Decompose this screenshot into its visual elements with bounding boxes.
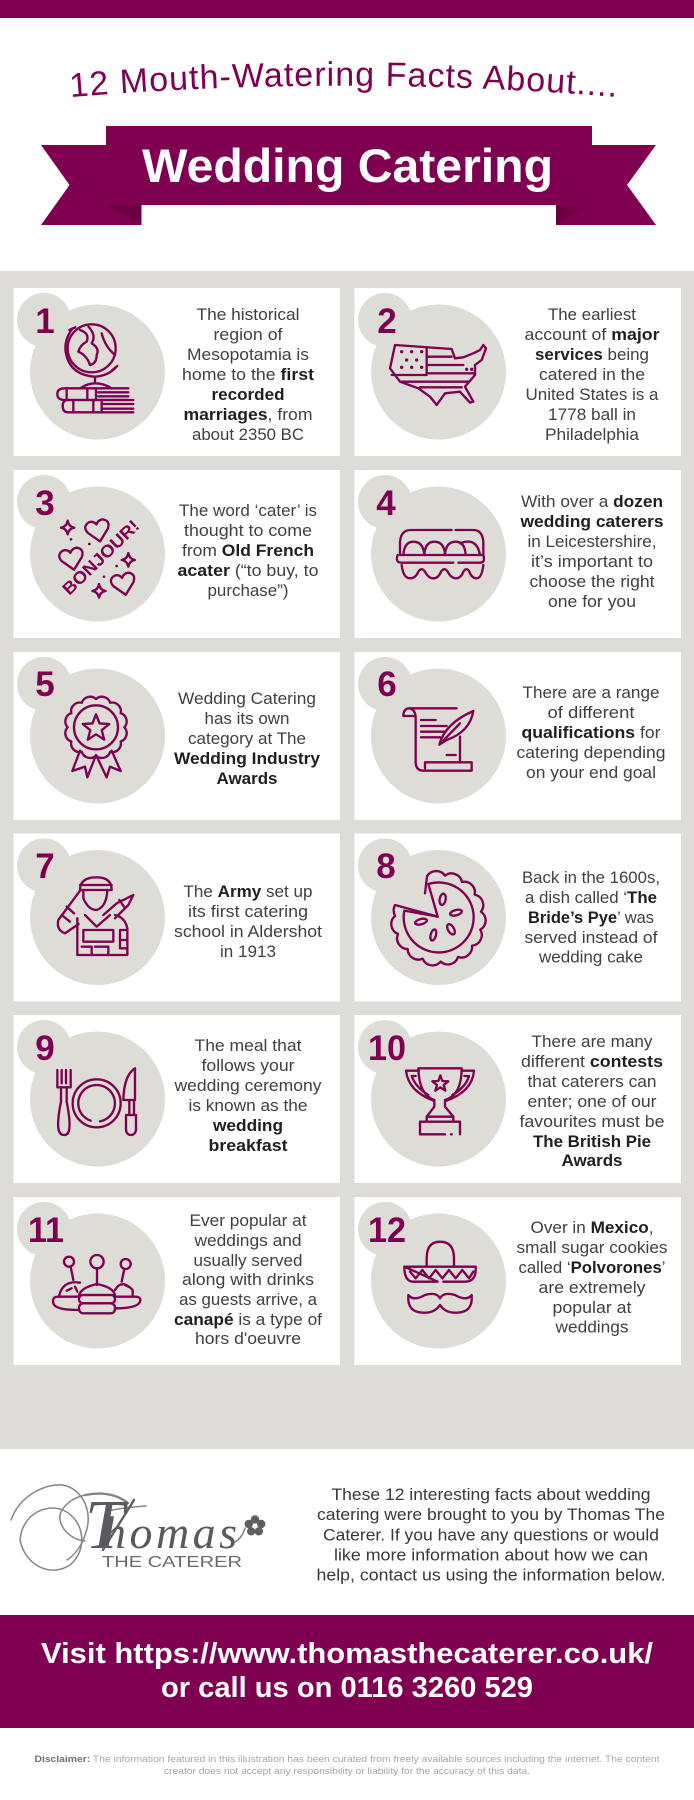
number 8: 8 <box>376 847 396 886</box>
text: fact 4 <box>519 492 664 611</box>
text: fact 10: The British Pie <box>533 1132 651 1151</box>
icon: saluting soldier <box>58 877 133 955</box>
text: fact 11: canapé is a type of <box>174 1310 322 1329</box>
text: fact 10: There are many <box>532 1032 653 1051</box>
text: fact 10: enter; one of our <box>528 1092 657 1111</box>
text: fact 2: account of major <box>524 325 660 344</box>
card 4 <box>354 470 681 638</box>
text: fact 6: of different <box>548 703 635 722</box>
banner: Wedding Catering: Wedding Catering <box>142 139 553 192</box>
card 11 <box>14 1197 340 1365</box>
text: fact 2: catered in the <box>539 365 645 384</box>
logo: Thomas The Caterer: THE CATERER <box>102 1554 242 1571</box>
text: fact 3: The word ‘cater’ is <box>179 501 317 520</box>
card 9 <box>14 1015 340 1183</box>
text: fact 8: wedding cake <box>538 948 643 966</box>
text: fact 9: breakfast <box>208 1136 288 1155</box>
text: fact 4: one for you <box>548 592 636 611</box>
text: fact 10: that caterers can <box>528 1072 656 1091</box>
text: fact 5: Wedding Catering <box>178 689 316 708</box>
text: fact 3: acater (“to buy, to <box>178 561 318 580</box>
text: fact 11 <box>174 1211 322 1348</box>
text: fact 9: is known as the <box>188 1096 308 1115</box>
disclaimer: creator does not accept any responsibility or liability for the accuracy of this data. <box>164 1766 530 1777</box>
text: fact 9: wedding ceremony <box>173 1076 322 1095</box>
text: closing paragraph: Caterer. If you have any questions or would <box>323 1526 659 1544</box>
text: fact 6: qualifications for <box>522 723 661 742</box>
title: 12 Mouth-Watering Facts About: 12 Mouth-Watering Facts About.... <box>72 61 614 97</box>
text: fact 3: thought to come <box>184 521 312 540</box>
icon: Bonjour hearts: BONJOUR! <box>58 516 143 599</box>
text: fact 10: favourites must be <box>520 1112 664 1131</box>
text: fact 7: The Army set up <box>184 882 312 901</box>
text: fact 12: popular at <box>552 1298 632 1317</box>
text: fact 7: in 1913 <box>220 942 276 961</box>
panel: call to action: Visit https://www.thomasthecaterer.co.uk/ <box>41 1638 653 1670</box>
text: fact 11: hors d'oeuvre <box>195 1329 301 1348</box>
card 8 <box>354 834 681 1002</box>
text: fact 5: Awards <box>216 769 278 788</box>
text: fact 6: There are a range <box>522 683 660 702</box>
text: fact 3 <box>178 501 318 600</box>
number 4: 4 <box>376 484 396 523</box>
text: fact 8 <box>522 868 660 966</box>
card 1 <box>14 288 340 456</box>
text: fact 1: The historical <box>196 305 300 324</box>
panel: call to action <box>0 1615 694 1728</box>
text: closing paragraph <box>316 1485 666 1584</box>
icon: canapes <box>53 1255 140 1313</box>
text: fact 8: Back in the 1600s, <box>522 868 660 887</box>
text: fact 12: weddings <box>554 1318 628 1336</box>
card 5 <box>14 652 340 820</box>
text: fact 4: in Leicestershire, <box>528 532 656 551</box>
card 3 <box>14 470 340 638</box>
card 2 <box>354 288 681 456</box>
icon: fork plate knife <box>57 1068 136 1135</box>
text: fact 2: services being <box>535 345 649 364</box>
text: fact 4: choose the right <box>530 572 655 591</box>
number 10: 10 <box>368 1029 406 1068</box>
panel: call to action: or call us on 0116 3260 529 <box>161 1672 533 1704</box>
text: fact 2: United States is a <box>526 385 659 404</box>
text: fact 3: purchase”) <box>208 581 288 600</box>
icon: egg carton <box>397 530 484 578</box>
text: fact 2 <box>524 305 660 444</box>
text: fact 6: catering depending <box>516 743 666 762</box>
text: fact 11: as guests arrive, a <box>179 1290 318 1309</box>
text: fact 11: usually served <box>194 1251 302 1270</box>
text: fact 8: served instead of <box>524 928 658 947</box>
disclaimer: Disclaimer: The information featured in this illustration has been curated from freely available sources including the internet. The content <box>34 1754 660 1765</box>
number 9: 9 <box>35 1029 55 1068</box>
disclaimer <box>34 1754 660 1777</box>
text: fact 4: wedding caterers <box>519 512 664 531</box>
card 12 <box>354 1197 681 1365</box>
logo: Thomas The Caterer: Thomas <box>85 1487 241 1564</box>
text: fact 1 <box>182 305 314 444</box>
text: fact 6 <box>516 683 666 782</box>
card 7 <box>14 834 340 1002</box>
icon: award rosette <box>65 697 127 777</box>
icon: scroll and quill <box>403 708 473 771</box>
text: fact 3: from Old French <box>182 541 314 560</box>
number 7: 7 <box>35 847 55 886</box>
text: fact 11: weddings and <box>193 1231 302 1250</box>
text: fact 7: its first catering <box>188 902 308 921</box>
text: fact 1: home to the first <box>182 365 314 384</box>
text: fact 8: a dish called ‘The <box>525 888 657 907</box>
text: fact 12: small sugar cookies <box>516 1238 668 1257</box>
text: fact 2: 1778 ball in <box>548 405 636 424</box>
text: fact 11: Ever popular at <box>190 1211 307 1230</box>
text: fact 10: Awards <box>562 1151 622 1170</box>
text: fact 10: different contests <box>521 1052 663 1071</box>
icon: globe on books <box>57 324 133 412</box>
text: fact 6: on your end goal <box>526 763 656 782</box>
text: fact 5: has its own <box>204 709 290 728</box>
banner: Wedding Catering <box>41 126 656 225</box>
number 12: 12 <box>368 1211 406 1250</box>
text: fact 1: region of <box>214 325 283 344</box>
icon: sombrero and moustache <box>404 1242 476 1313</box>
number 3: 3 <box>35 484 55 523</box>
card 10 <box>354 1015 681 1183</box>
icon: pie with slice removed <box>391 871 486 965</box>
text: fact 5: category at The <box>188 729 306 748</box>
text: fact 1: Mesopotamia is <box>187 345 309 364</box>
logo: Thomas The Caterer <box>11 1485 265 1571</box>
text: fact 12 <box>516 1218 668 1336</box>
text: fact 10 <box>520 1032 664 1170</box>
text: fact 2: The earliest <box>548 305 636 324</box>
icon: trophy <box>406 1068 474 1134</box>
text: closing paragraph: catering were brought to you by Thomas The <box>317 1505 665 1524</box>
text: fact 9: wedding <box>212 1116 283 1135</box>
card 6 <box>354 652 681 820</box>
text: fact 12: called ‘Polvorones’ <box>518 1258 666 1277</box>
text: fact 11: along with drinks <box>182 1270 314 1289</box>
text: closing paragraph: help, contact us using the information below. <box>316 1566 666 1584</box>
text: fact 12: are extremely <box>538 1278 646 1297</box>
panel: facts <box>0 271 694 1449</box>
icon: flower <box>245 1515 265 1536</box>
text: fact 4: With over a dozen <box>521 492 663 511</box>
text: fact 4: it’s important to <box>531 552 653 571</box>
number 11: 11 <box>28 1211 64 1250</box>
text: fact 12: Over in Mexico, <box>530 1218 654 1237</box>
text: fact 1: recorded <box>212 385 284 404</box>
text: fact 9: The meal that <box>194 1036 302 1055</box>
text: fact 5 <box>174 689 321 788</box>
text: closing paragraph: These 12 interesting facts about wedding <box>332 1485 650 1504</box>
number 6: 6 <box>377 665 397 704</box>
text: fact 8: Bride’s Pye’ was <box>528 908 654 927</box>
text: fact 9: follows your <box>202 1056 295 1075</box>
text: fact 2: Philadelphia <box>545 425 640 444</box>
icon: USA flag map <box>390 345 486 405</box>
text: fact 5: Wedding Industry <box>174 749 321 768</box>
text: fact 1: about 2350 BC <box>192 425 304 444</box>
text: fact 7: school in Aldershot <box>174 922 322 941</box>
top bar <box>0 0 694 18</box>
number 5: 5 <box>35 665 55 704</box>
number 2: 2 <box>377 302 397 341</box>
text: fact 1: marriages, from <box>184 405 312 424</box>
text: closing paragraph: like more information about how we can <box>334 1546 648 1564</box>
number 1: 1 <box>35 302 55 341</box>
text: fact 9 <box>173 1036 322 1155</box>
text: fact 7 <box>174 882 322 961</box>
